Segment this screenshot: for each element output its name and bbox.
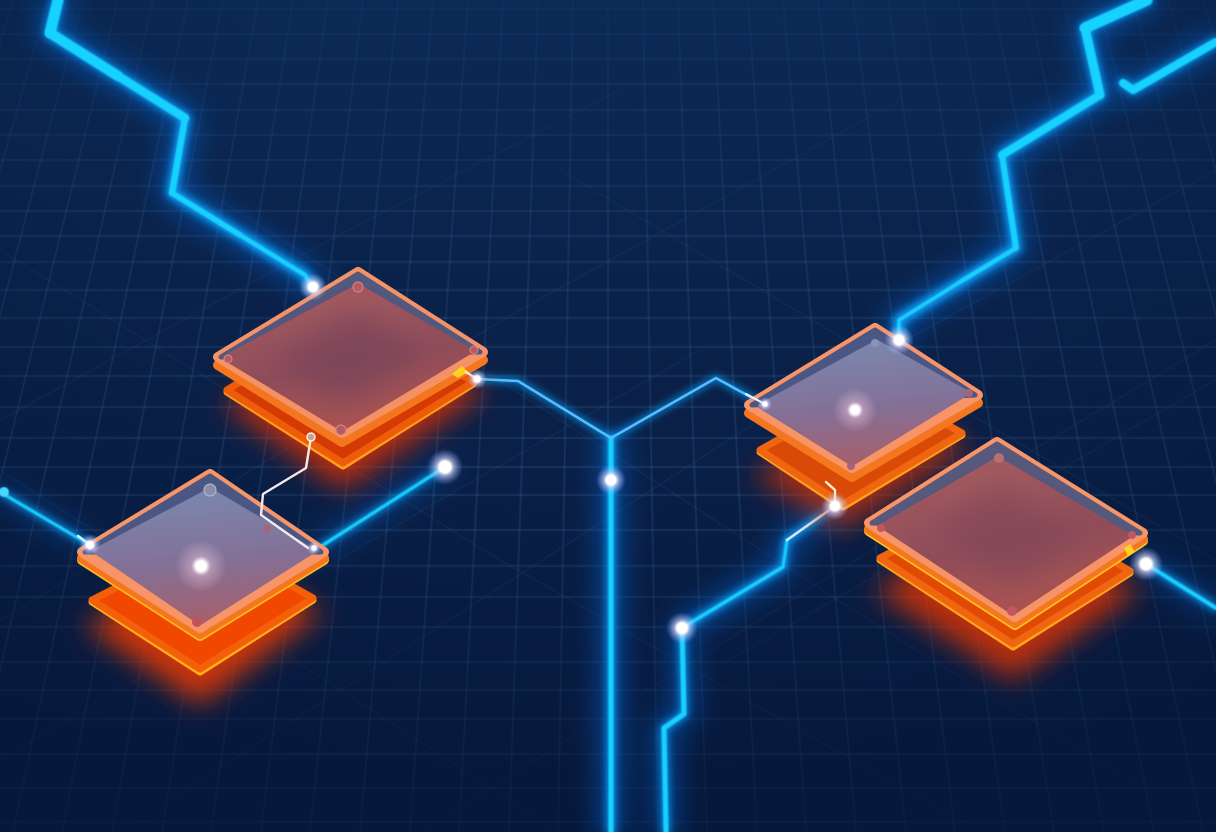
node: top of plate 1	[299, 273, 327, 301]
center spark	[175, 540, 227, 592]
top plate outline	[749, 328, 978, 468]
white wires over plates	[78, 372, 835, 548]
corner dots	[847, 339, 973, 470]
face shade	[270, 312, 430, 405]
top plate edge highlight	[869, 450, 1143, 625]
center spark	[833, 388, 877, 432]
top plate rim	[872, 444, 1140, 533]
top plate rim	[221, 274, 480, 357]
lower plate	[760, 385, 962, 504]
node: center trunk	[596, 465, 626, 495]
wire entering plate 3 left	[746, 394, 765, 404]
white wire: plate 1 to plate 2	[261, 437, 311, 548]
node: plate 2 right	[307, 541, 321, 555]
top plate face	[96, 491, 312, 622]
corner dots	[877, 453, 1136, 616]
corner dots	[224, 282, 478, 435]
plate 3: upper right cool	[749, 328, 978, 528]
top plate rim	[752, 330, 975, 405]
corner glint	[1124, 544, 1135, 556]
thin junction wire	[787, 506, 835, 540]
node: wire end	[427, 449, 463, 485]
top plate outline	[869, 442, 1143, 617]
node: lower trace	[666, 612, 698, 644]
lower plate lit edge	[227, 312, 473, 466]
top plate edge highlight	[82, 482, 324, 636]
node: link ring	[307, 433, 315, 441]
lower plate lit edge	[880, 497, 1130, 647]
lower plate	[92, 540, 313, 669]
node: plate 4 right	[1129, 547, 1163, 581]
thin centre wire	[477, 378, 765, 438]
top plate outline	[82, 474, 324, 628]
top plate edge	[749, 336, 978, 477]
node: plate 2 left	[79, 534, 101, 556]
lower plate	[227, 310, 473, 463]
node: plate 3 top	[884, 325, 914, 355]
under glow	[85, 560, 322, 705]
node: plate 3 left	[758, 397, 772, 411]
under glow	[225, 320, 485, 490]
plate 4: lower right warm	[869, 442, 1143, 680]
top plate face	[761, 343, 966, 463]
under glow	[875, 520, 1140, 680]
top plate edge	[82, 480, 324, 634]
corner dots	[192, 484, 271, 627]
lower plate lit edge	[760, 387, 962, 507]
plate 1: upper left warm	[218, 272, 485, 490]
top plate face	[226, 287, 470, 428]
corner glint	[452, 366, 468, 378]
node: junction below plate 3	[821, 492, 849, 520]
wire entering plate 2 left	[78, 536, 92, 546]
top plate edge	[869, 448, 1143, 623]
lower plate	[880, 495, 1130, 644]
lower plate lit edge	[92, 542, 313, 672]
plate 2: lower left cool	[82, 474, 324, 705]
node: right of plate 1	[467, 369, 487, 389]
white wire: plate 3 to junction	[826, 482, 835, 506]
face shade	[930, 488, 1085, 585]
top plate outline	[218, 272, 483, 433]
node: left edge	[0, 487, 9, 497]
wire entering plate 1 right	[466, 372, 477, 379]
under glow	[755, 400, 970, 528]
top plate face	[883, 460, 1128, 612]
top plate rim	[85, 476, 321, 552]
top plate edge	[218, 280, 483, 442]
nodes	[0, 273, 1163, 644]
